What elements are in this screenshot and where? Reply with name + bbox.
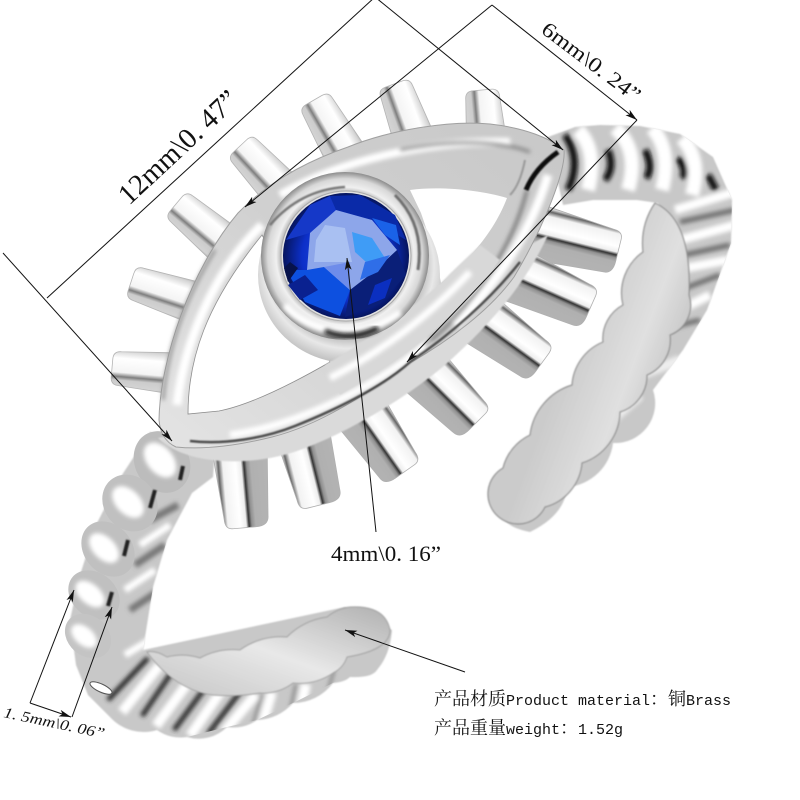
pupil bezel [258, 172, 500, 395]
frame highlights [163, 142, 548, 435]
dark corner [526, 152, 558, 190]
right shank back strip [505, 125, 732, 532]
blue gemstone [283, 193, 409, 319]
label: 12mm: 12mm\0. 47” [112, 84, 245, 211]
measurement: 1.5mm [30, 590, 112, 717]
shank ribs [108, 505, 334, 736]
upper lashes [110, 76, 511, 397]
shank back strip [70, 432, 392, 739]
label: 4mm: 4mm\0. 16” [331, 541, 441, 566]
measurement: 12mm [3, 0, 563, 441]
eyelashes [110, 76, 625, 530]
frame body [159, 123, 564, 448]
bezel ring [261, 172, 429, 340]
lower rim overlap [325, 245, 500, 395]
frame backing flange [158, 235, 548, 461]
ring band: lower left twisted shank [56, 421, 392, 739]
shank beads [56, 421, 201, 697]
label: 1.5mm: 1. 5mm\0. 06” [2, 705, 106, 742]
leader to inner band [345, 630, 465, 672]
opening: upper right [410, 188, 507, 283]
product material line: 产品材质Product material：铜Brass [434, 685, 731, 711]
product weight line: 产品重量weight：1.52g [434, 714, 623, 740]
gem facets [284, 195, 406, 317]
measurement: 6mm [245, 5, 637, 362]
lower lashes [210, 203, 625, 530]
measurement: 4mm [347, 258, 376, 532]
eye frame [158, 123, 564, 461]
bezel lower bulge [258, 187, 440, 363]
right shank flat end [488, 203, 691, 524]
shank flat end [147, 607, 390, 696]
ring band: right twisted shank [488, 125, 735, 532]
opening: lower left [188, 235, 330, 414]
label: 6mm: 6mm\0. 24” [537, 17, 646, 107]
right shank ribs [560, 126, 732, 420]
frame lower dark line [190, 262, 520, 442]
